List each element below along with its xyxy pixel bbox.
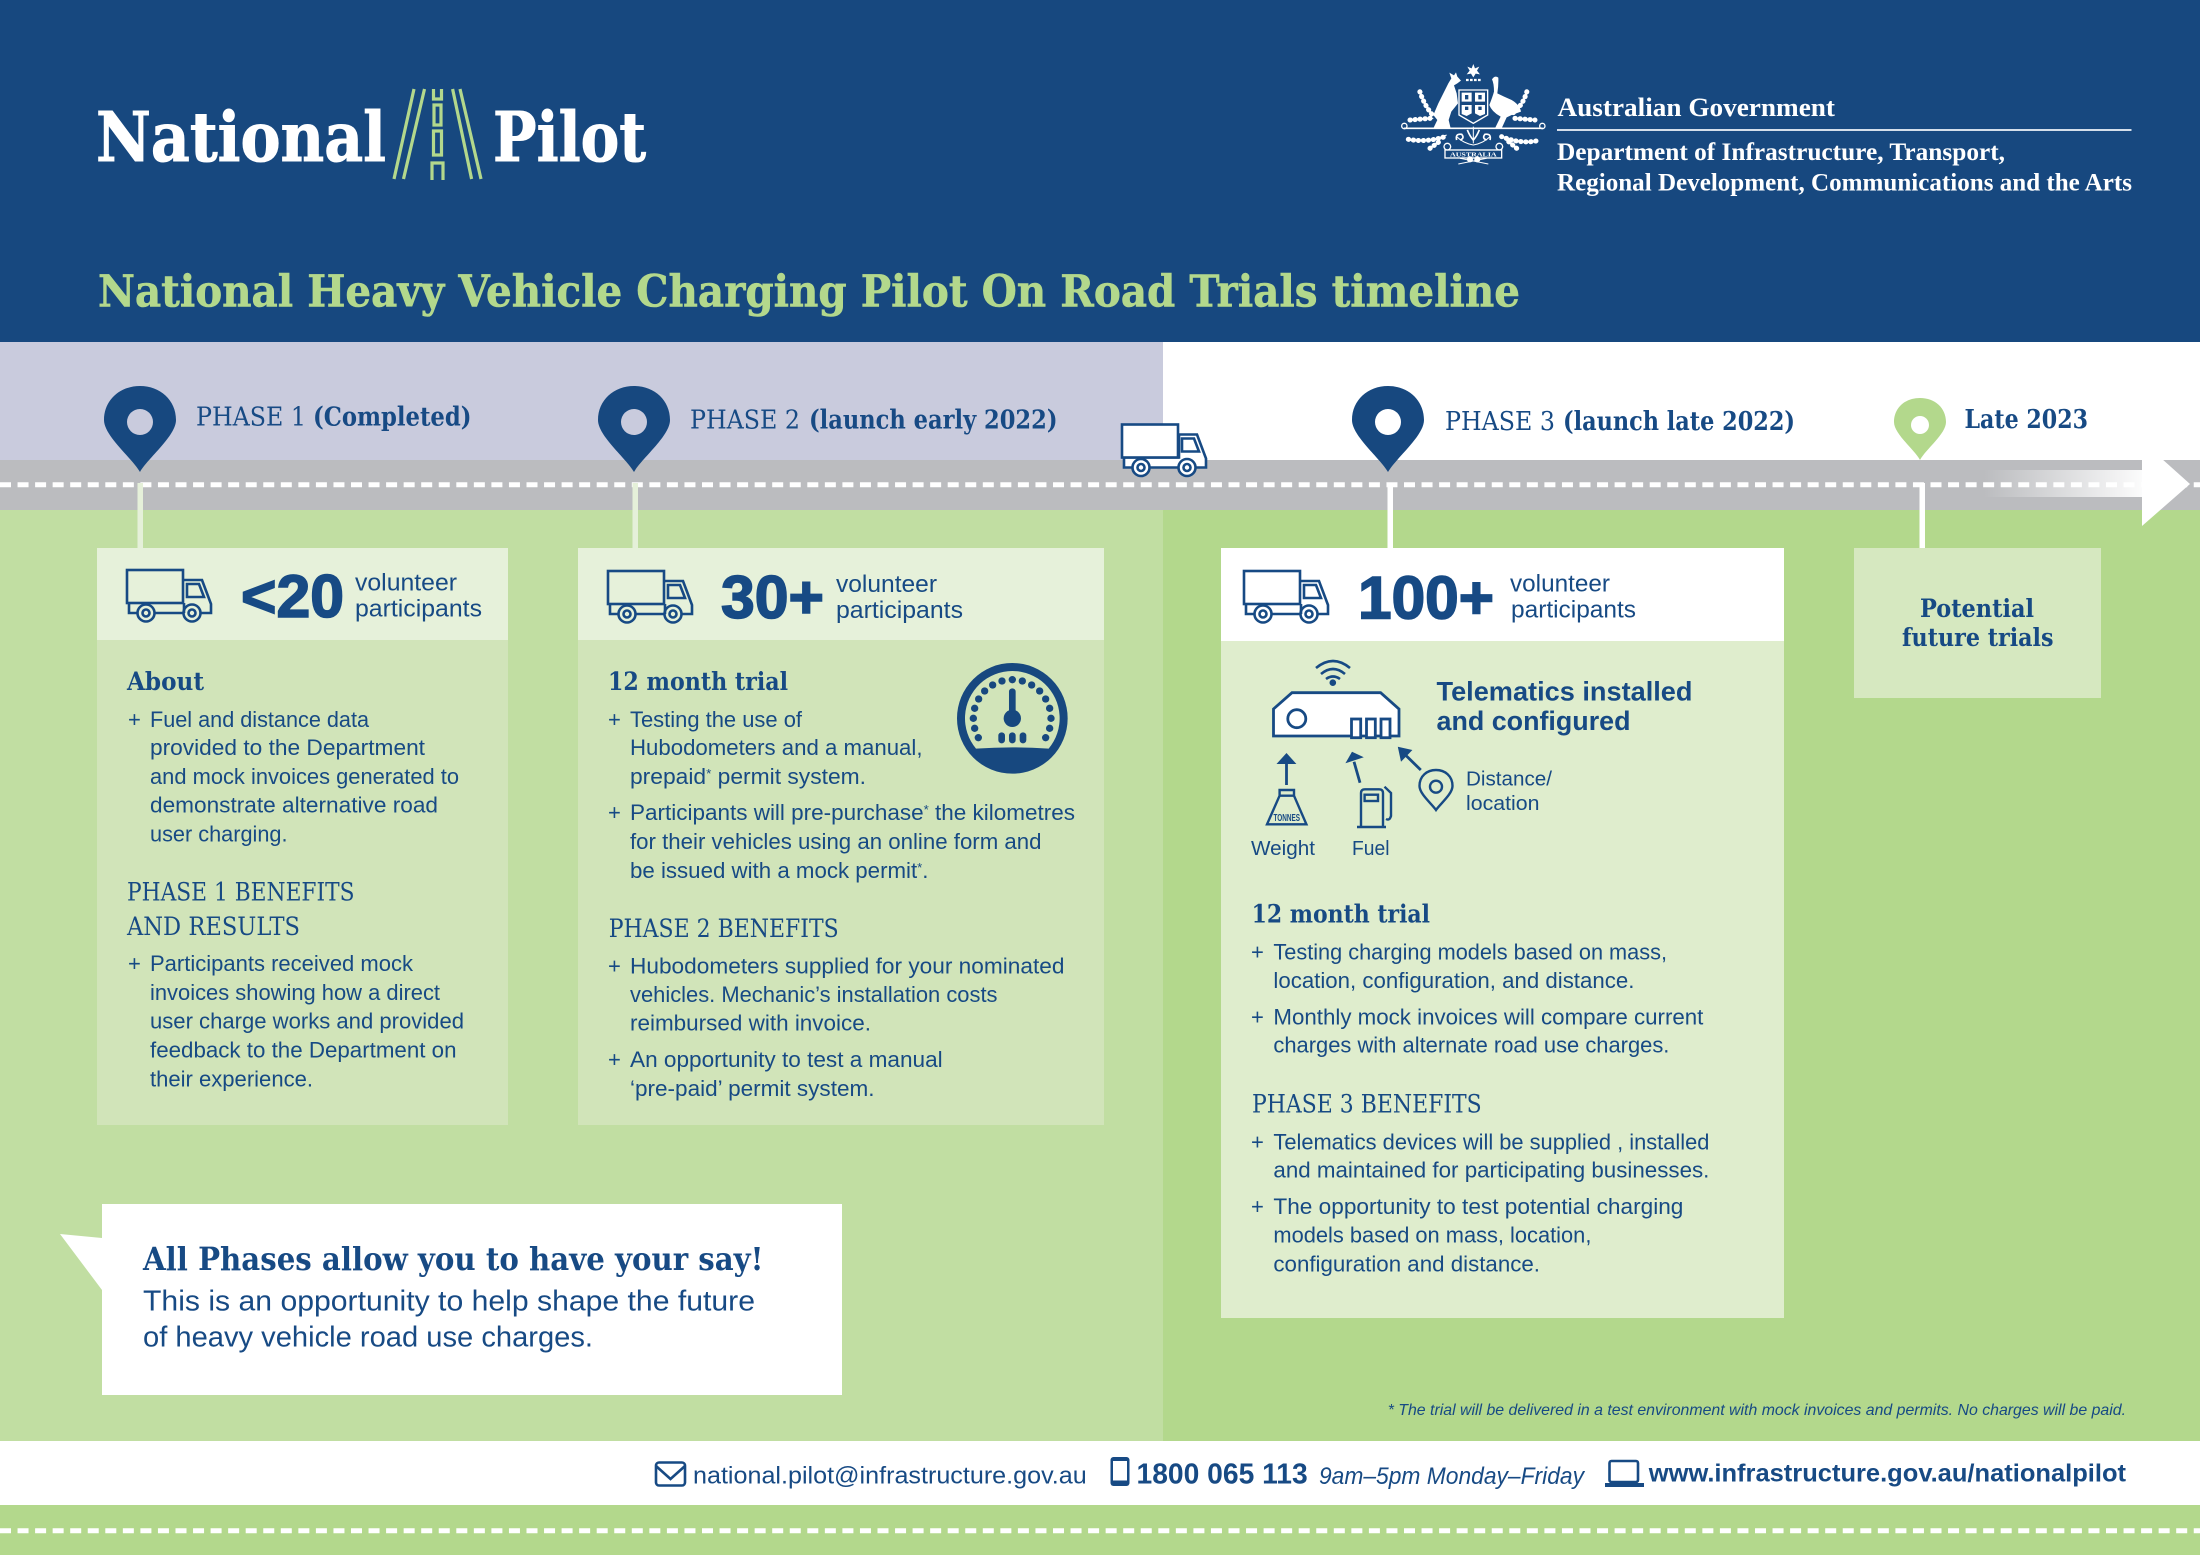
phase 3 marker: (launch late 2022) bbox=[1563, 407, 1795, 437]
text: 12 month trial: prepaid bbox=[630, 764, 703, 789]
text: about: user charging. bbox=[150, 822, 288, 846]
text: about bbox=[126, 667, 459, 846]
diagram: telematics device: Weight bbox=[1251, 837, 1315, 860]
callout: have your say: All Phases allow you to have your say! bbox=[142, 1240, 764, 1278]
panel: potential future trials: Potential bbox=[1920, 594, 2034, 623]
text: 12 month trial: Monthly mock invoices will compare current bbox=[1273, 1004, 1703, 1029]
phase 2 marker bbox=[598, 386, 1058, 472]
text: 12 month trial: * bbox=[706, 766, 711, 781]
text: phase 2 benefits: + bbox=[608, 954, 621, 979]
panel: potential future trials bbox=[1854, 548, 2101, 698]
callout: have your say: This is an opportunity to help shape the future bbox=[143, 1286, 755, 1318]
stem: phase 1 bbox=[138, 483, 143, 548]
government wordmark: Australian Government bbox=[1558, 93, 1835, 122]
text: phase 2 benefits: vehicles. Mechanic’s installation costs bbox=[630, 982, 998, 1007]
phone number: 1800 065 113 bbox=[1136, 1458, 1308, 1490]
text: 12 month trial bbox=[1251, 900, 1703, 1058]
stem: phase 3 bbox=[1388, 483, 1393, 548]
text: phase 1 benefits: feedback to the Department on bbox=[150, 1037, 456, 1062]
government wordmark bbox=[1557, 93, 2132, 196]
text: phase 3 benefits: Telematics devices will be supplied , installed bbox=[1273, 1129, 1709, 1154]
website: www.infrastructure.gov.au/nationalpilot bbox=[1648, 1460, 2127, 1488]
text: 12 month trial: be issued with a mock permit bbox=[630, 858, 914, 883]
text: 12 month trial: + bbox=[1251, 1004, 1264, 1029]
icon: Australian coat of arms bbox=[1402, 64, 1545, 164]
phase 2 marker: (launch early 2022) bbox=[809, 406, 1058, 436]
government wordmark: Department of Infrastructure, Transport, bbox=[1557, 139, 2005, 166]
text: phase 3 benefits: + bbox=[1251, 1194, 1264, 1219]
text: 12 month trial: for their vehicles using an online form and bbox=[630, 829, 1042, 854]
late 2023 marker bbox=[1894, 398, 2088, 460]
logo: National Pilot: Pilot bbox=[493, 98, 647, 178]
logo: National Pilot: National bbox=[96, 98, 386, 178]
text: 12 month trial bbox=[608, 667, 1075, 883]
text: phase 1 benefits: user charge works and provided bbox=[150, 1009, 464, 1034]
text: about: + bbox=[128, 707, 141, 732]
callout: have your say: of heavy vehicle road use charges. bbox=[143, 1322, 593, 1354]
icon: truck bbox=[608, 571, 692, 622]
text: phase 1 benefits: PHASE 1 BENEFITS bbox=[127, 878, 354, 906]
text: 12 month trial: + bbox=[608, 707, 621, 732]
panel: phase 1 bbox=[97, 548, 508, 1125]
icon: weight: TONNES bbox=[1274, 813, 1300, 824]
phase 1 marker: PHASE 1 bbox=[196, 403, 306, 433]
text: about: Fuel and distance data bbox=[150, 707, 370, 732]
icon: Australian coat of arms: AUSTRALIA bbox=[1450, 151, 1497, 158]
email address: national.pilot@infrastructure.gov.au bbox=[693, 1462, 1087, 1489]
text: phase 3 benefits: and maintained for participating businesses. bbox=[1273, 1157, 1709, 1182]
stat: 30+ participants: participants bbox=[836, 597, 963, 624]
logo: National Pilot bbox=[96, 89, 647, 180]
arrow: timeline direction bbox=[1984, 441, 2190, 526]
text: phase 3 benefits: PHASE 3 BENEFITS bbox=[1252, 1089, 1482, 1118]
stat: 100+ participants: participants bbox=[1511, 596, 1636, 624]
government wordmark: Regional Development, Communications and the Arts bbox=[1557, 170, 2132, 196]
text: 12 month trial: + bbox=[608, 800, 621, 825]
phase 2 marker: PHASE 2 bbox=[690, 406, 800, 436]
stat: under 20 participants: volunteer bbox=[355, 570, 457, 596]
road timeline band bbox=[0, 460, 2200, 510]
text: phase 3 benefits: The opportunity to test potential charging bbox=[1273, 1194, 1683, 1219]
text: phase 1 benefits: their experience. bbox=[150, 1066, 313, 1092]
phase 3 marker bbox=[1352, 386, 1795, 472]
diagram: telematics device: Fuel bbox=[1352, 837, 1390, 860]
stat: 30+ participants: volunteer bbox=[836, 571, 937, 598]
phase 1 marker: (Completed) bbox=[313, 403, 472, 433]
text: 12 month trial: . bbox=[922, 858, 928, 883]
stat: under 20 participants bbox=[241, 563, 482, 630]
stat: under 20 participants: <20 bbox=[241, 563, 344, 630]
text: phase 2 benefits: ‘pre-paid’ permit system. bbox=[630, 1076, 874, 1101]
diagram: telematics device: location bbox=[1466, 792, 1540, 815]
arrows into device bbox=[1276, 747, 1421, 785]
phase 1 marker bbox=[104, 386, 472, 472]
stem: phase 2 bbox=[632, 483, 638, 548]
callout: have your say bbox=[60, 1204, 842, 1395]
stat: 30+ participants: 30+ bbox=[721, 564, 824, 631]
stat: 100+ participants: 100+ bbox=[1358, 564, 1494, 631]
text: 12 month trial: Testing charging models based on mass, bbox=[1273, 939, 1667, 964]
title: National Heavy Vehicle Charging Pilot On Road Trials timeline bbox=[98, 266, 1520, 318]
icon: wifi bbox=[1316, 661, 1350, 685]
stat: 100+ participants: volunteer bbox=[1510, 571, 1610, 598]
stem: late 2023 bbox=[1920, 483, 1925, 548]
text: 12 month trial: Participants will pre-purchase bbox=[630, 800, 917, 825]
text: phase 3 benefits: + bbox=[1251, 1129, 1264, 1154]
text: 12 month trial: * bbox=[924, 802, 929, 817]
text: phase 3 benefits bbox=[1251, 1089, 1709, 1276]
panel: phase 2 bbox=[578, 548, 1104, 1125]
icon: location pin bbox=[1420, 770, 1452, 810]
text: 12 month trial: 12 month trial bbox=[1252, 900, 1430, 929]
text: about: and mock invoices generated to bbox=[150, 764, 459, 789]
text: 12 month trial: permit system. bbox=[711, 764, 866, 789]
late 2023 marker: Late 2023 bbox=[1964, 405, 2088, 435]
text: 12 month trial: 12 month trial bbox=[608, 667, 788, 696]
text: phase 2 benefits: + bbox=[608, 1047, 621, 1072]
phone hours: 9am–5pm Monday–Friday bbox=[1319, 1463, 1586, 1490]
text: 12 month trial: the kilometres bbox=[929, 800, 1075, 825]
panel: phase 3 bbox=[1221, 548, 1784, 1318]
text: phase 1 benefits: invoices showing how a direct bbox=[150, 980, 440, 1005]
text: 12 month trial: * bbox=[917, 860, 922, 875]
diagram: telematics device: Distance/ bbox=[1466, 768, 1552, 791]
contact bar bbox=[0, 1441, 2200, 1505]
text: 12 month trial: Hubodometers and a manual, bbox=[630, 735, 922, 760]
icon: truck bbox=[127, 570, 211, 622]
phase 3 marker: PHASE 3 bbox=[1445, 407, 1555, 437]
diagram: telematics device bbox=[1251, 661, 1692, 860]
header band bbox=[0, 0, 2200, 342]
diagram: telematics device: Telematics installed bbox=[1436, 677, 1692, 707]
text: phase 1 benefits bbox=[126, 878, 464, 1092]
text: 12 month trial: location, configuration, and distance. bbox=[1273, 968, 1634, 993]
stat: 100+ participants bbox=[1358, 564, 1636, 631]
text: phase 2 benefits: PHASE 2 BENEFITS bbox=[609, 914, 839, 943]
text: phase 3 benefits: models based on mass, location, bbox=[1273, 1223, 1591, 1248]
diagram: telematics device: and configured bbox=[1436, 706, 1630, 736]
icon: truck on road bbox=[1122, 424, 1206, 476]
text: 12 month trial: Testing the use of bbox=[630, 707, 803, 732]
text: phase 3 benefits: configuration and distance. bbox=[1273, 1251, 1540, 1276]
text: phase 2 benefits bbox=[608, 914, 1064, 1101]
footnote: * The trial will be delivered in a test environment with mock invoices and permits. No charges will be paid. bbox=[1388, 1402, 2126, 1419]
stat: under 20 participants: participants bbox=[355, 596, 482, 622]
text: phase 2 benefits: Hubodometers supplied for your nominated bbox=[630, 954, 1064, 979]
icon: weight bbox=[1267, 790, 1306, 824]
icon: truck bbox=[1244, 571, 1328, 622]
text: 12 month trial: charges with alternate road use charges. bbox=[1273, 1033, 1669, 1058]
icon: laptop bbox=[1605, 1461, 1644, 1487]
icon: speedometer bbox=[957, 663, 1068, 774]
icon: fuel pump bbox=[1357, 787, 1391, 827]
text: phase 1 benefits: AND RESULTS bbox=[126, 912, 300, 941]
text: phase 2 benefits: An opportunity to test a manual bbox=[630, 1047, 943, 1072]
text: about: provided to the Department bbox=[150, 735, 425, 760]
icon: email bbox=[656, 1462, 685, 1486]
text: about: demonstrate alternative road bbox=[150, 792, 438, 818]
panel: potential future trials: future trials bbox=[1902, 623, 2054, 652]
text: 12 month trial: + bbox=[1251, 939, 1264, 964]
text: about: About bbox=[126, 667, 204, 696]
icon: telematics unit bbox=[1274, 693, 1399, 738]
text: phase 2 benefits: reimbursed with invoice. bbox=[630, 1011, 871, 1036]
text: phase 1 benefits: Participants received mock bbox=[150, 951, 414, 976]
stat: 30+ participants bbox=[721, 564, 963, 631]
text: phase 1 benefits: + bbox=[128, 951, 141, 976]
icon: phone bbox=[1110, 1457, 1130, 1486]
